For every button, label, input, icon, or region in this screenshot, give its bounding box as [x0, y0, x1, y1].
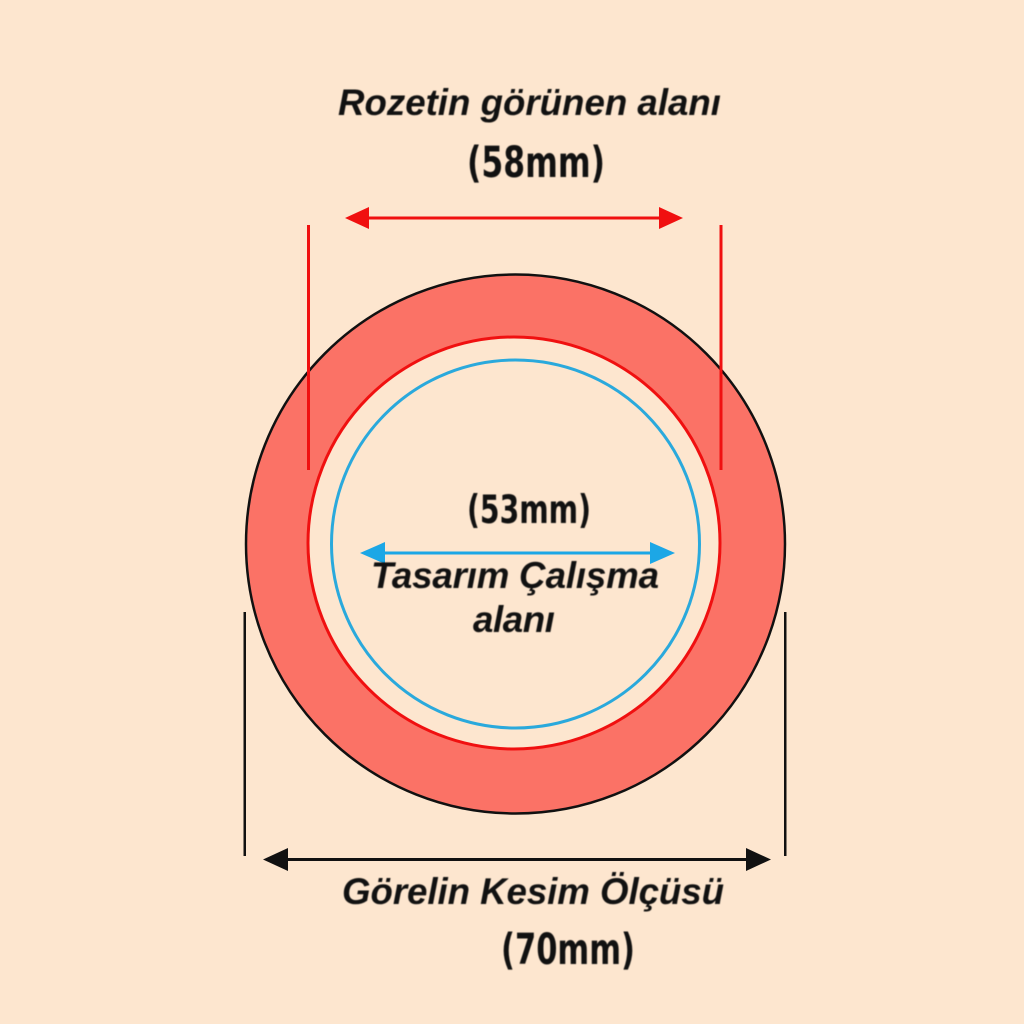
arrow: red 58mm span — [345, 207, 683, 229]
label: design work area — [371, 555, 659, 640]
badge diagram circles — [246, 274, 785, 814]
label: cut size: Görelin Kesim Ölçüsü — [342, 871, 724, 912]
arrow: blue 53mm span — [360, 542, 675, 564]
arrow: black 70mm span — [263, 848, 771, 871]
black guide lines — [244, 612, 786, 856]
red guide lines — [307, 225, 722, 470]
measurement: 70mm: (70mm) — [501, 925, 635, 975]
label: design work area: Tasarım Çalışma — [371, 555, 659, 596]
label: design work area: alanı — [473, 599, 555, 640]
measurement: 58mm: (58mm) — [467, 138, 605, 188]
measurement: 53mm: (53mm) — [467, 488, 591, 533]
heading: visible badge area: Rozetin görünen alanı — [338, 82, 721, 123]
